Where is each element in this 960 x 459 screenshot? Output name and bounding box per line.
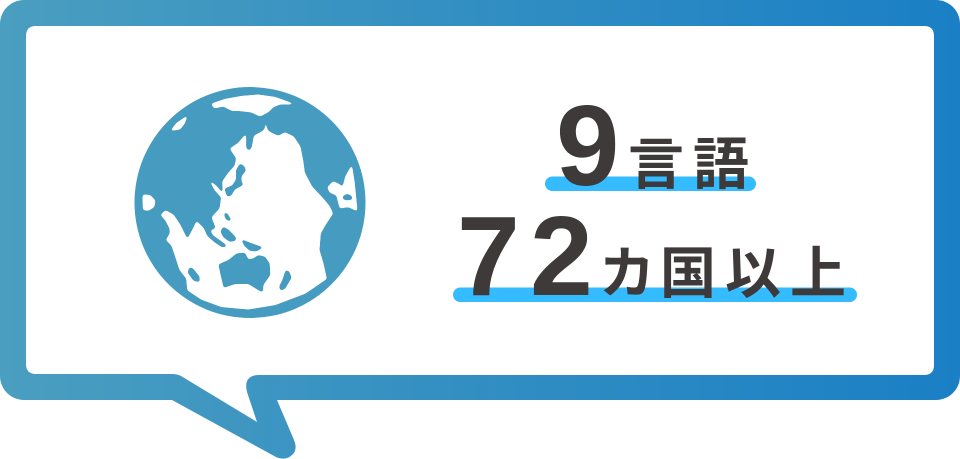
- small northern patch: [171, 116, 187, 130]
- underline: countries: [453, 288, 857, 302]
- western patch: [143, 195, 155, 210]
- madagascar: [188, 268, 200, 282]
- icon: globe: [134, 87, 366, 318]
- japan: [224, 163, 246, 197]
- australia: [218, 253, 270, 292]
- arctic: [212, 95, 293, 116]
- americas patch: [328, 166, 357, 211]
- new guinea: [241, 239, 263, 251]
- heading: 9 languages: 9: [556, 83, 619, 210]
- heading: 72 countries: カ国以上: [599, 242, 846, 305]
- heading: 9 languages: [556, 83, 749, 210]
- heading: 72 countries: [457, 193, 846, 319]
- new zealand: [279, 270, 292, 291]
- borneo: [220, 227, 236, 242]
- landmass: [161, 123, 333, 309]
- underline: languages: [545, 176, 756, 191]
- philippines: [224, 213, 231, 222]
- lake: [342, 194, 353, 200]
- heading: 9 languages: 言語: [628, 133, 749, 196]
- heading: 72 countries: 72: [457, 193, 593, 319]
